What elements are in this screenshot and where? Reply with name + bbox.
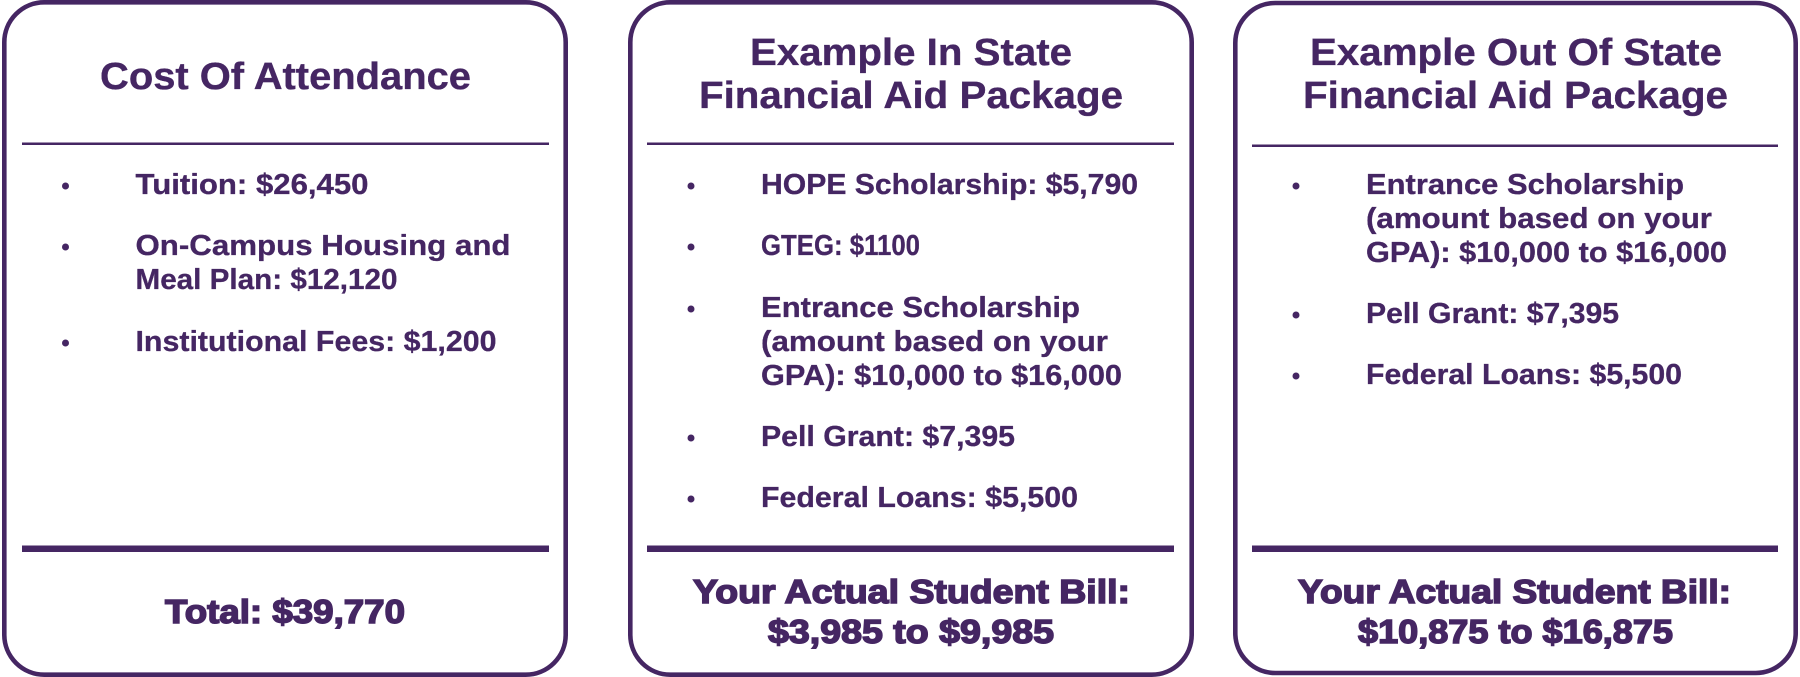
cost list: Meal Plan: $12,120 [136,264,398,296]
student bill: in state: Your Actual Student Bill: [693,573,1130,610]
heading: out of state: Example Out Of State [1310,32,1722,74]
panel: out of state aid package [1235,3,1796,673]
panel border [1235,3,1796,673]
cost list: Institutional Fees: $1,200 [136,326,497,358]
cost list: On-Campus Housing and [136,230,510,262]
panel border [4,2,566,675]
in state list: GPA): $10,000 to $16,000 [761,360,1122,392]
out of state list: GPA): $10,000 to $16,000 [1366,237,1727,269]
out of state list [1292,169,1727,391]
student bill: in state [693,573,1130,650]
heading: in state [699,32,1123,117]
panel: cost of attendance [4,2,566,675]
in state list: (amount based on your [761,326,1108,358]
student bill: out of state: Your Actual Student Bill: [1298,573,1731,610]
total: Total: $39,770 [165,593,405,630]
cost list [62,169,510,358]
student bill: out of state: $10,875 to $16,875 [1358,613,1673,650]
student bill: in state: $3,985 to $9,985 [768,613,1054,650]
heading: in state: Example In State [750,32,1072,74]
out of state list: Entrance Scholarship [1366,169,1684,201]
in state list: GTEG: $1100 [761,230,920,262]
panel: in state aid package [630,2,1192,675]
in state list: Federal Loans: $5,500 [761,482,1078,514]
heading: out of state [1303,32,1728,117]
in state list: Pell Grant: $7,395 [761,421,1015,453]
heading: out of state: Financial Aid Package [1303,75,1728,117]
out of state list: (amount based on your [1366,203,1712,235]
in state list: Entrance Scholarship [761,292,1080,324]
in state list [688,169,1138,514]
heading: cost of attendance: Cost Of Attendance [100,56,471,98]
in state list: HOPE Scholarship: $5,790 [761,169,1138,201]
out of state list: Federal Loans: $5,500 [1366,359,1682,391]
cost list: Tuition: $26,450 [136,169,368,201]
out of state list: Pell Grant: $7,395 [1366,298,1619,330]
student bill: out of state [1298,573,1731,650]
panel border [630,2,1192,675]
heading: in state: Financial Aid Package [699,75,1123,117]
